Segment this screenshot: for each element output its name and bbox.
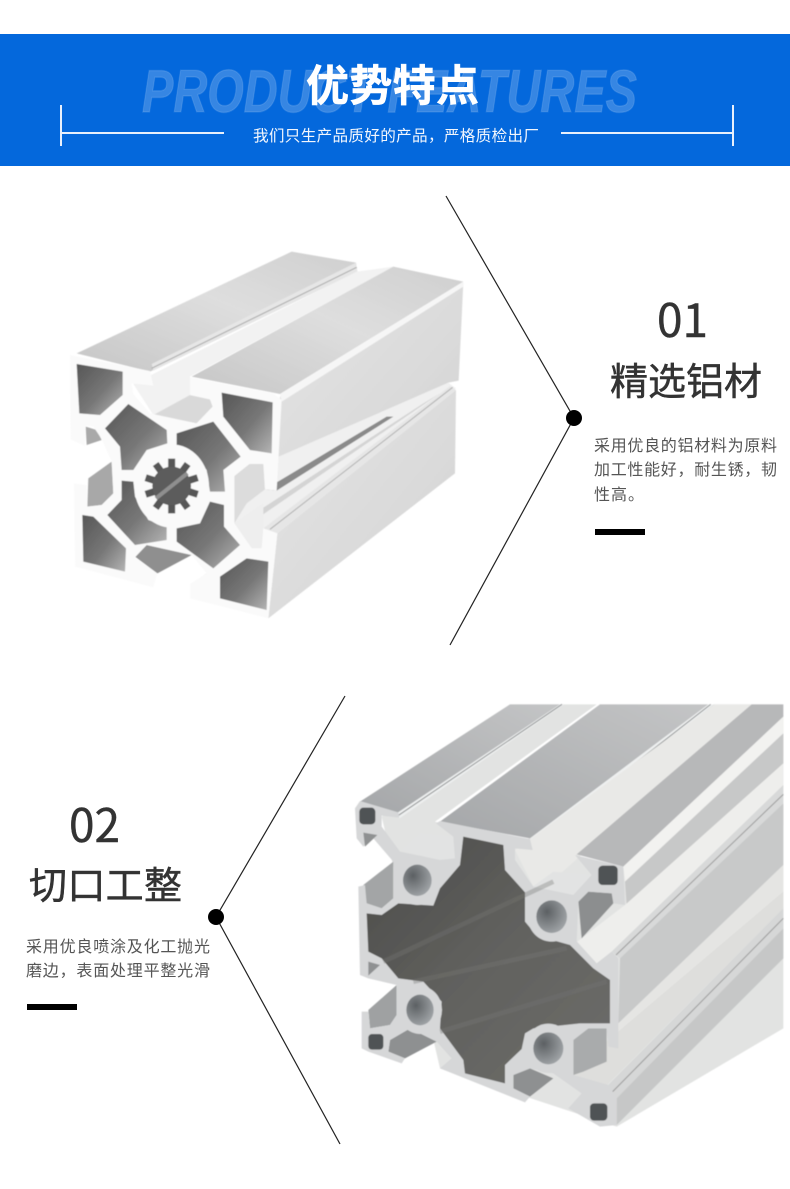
title: 优势特点: [306, 52, 479, 114]
body 01: 加工性能好，耐生锈，韧: [594, 456, 777, 480]
heading 01: 精选铝材: [610, 351, 762, 406]
connector line 02: [208, 696, 345, 1144]
body 01: 性高。: [594, 481, 644, 505]
aluminium profile image 2: [355, 704, 783, 1127]
corner chambers: [359, 808, 375, 824]
round screw bores: [395, 856, 576, 1073]
header banner: [0, 34, 790, 166]
body 01: [594, 432, 777, 505]
number 02: 02: [69, 790, 120, 856]
groove shadows: [363, 862, 393, 908]
text block 02: [26, 790, 210, 1010]
right bracket line: [561, 105, 733, 146]
lower groove: [234, 383, 456, 528]
ghost text: PRODUCT FEATURES: PRODUCT FEATURES: [142, 58, 637, 125]
body 02: 磨边，表面处理平整光滑: [26, 957, 210, 981]
heading 02: 切口工整: [29, 855, 182, 910]
text block 01: [594, 285, 777, 535]
accent bar 01: [595, 529, 645, 535]
body 02: 采用优良喷涂及化工抛光: [26, 933, 210, 957]
central cavity: [367, 837, 610, 1083]
number 01: 01: [657, 285, 708, 351]
body 02: [26, 933, 210, 981]
subtitle: 我们只生产品质好的产品，严格质检出厂: [253, 124, 539, 146]
groove shadows: [234, 464, 265, 523]
centre bore: [134, 444, 209, 528]
connector line 01: [446, 196, 582, 645]
profile chambers: [77, 364, 123, 415]
body 01: 采用优良的铝材料为原料: [594, 432, 777, 456]
profile front face: [70, 355, 282, 618]
left bracket line: [61, 105, 224, 146]
profile front face: [355, 801, 625, 1127]
accent bar 02: [27, 1004, 77, 1010]
aluminium profile image 1: [70, 252, 463, 618]
